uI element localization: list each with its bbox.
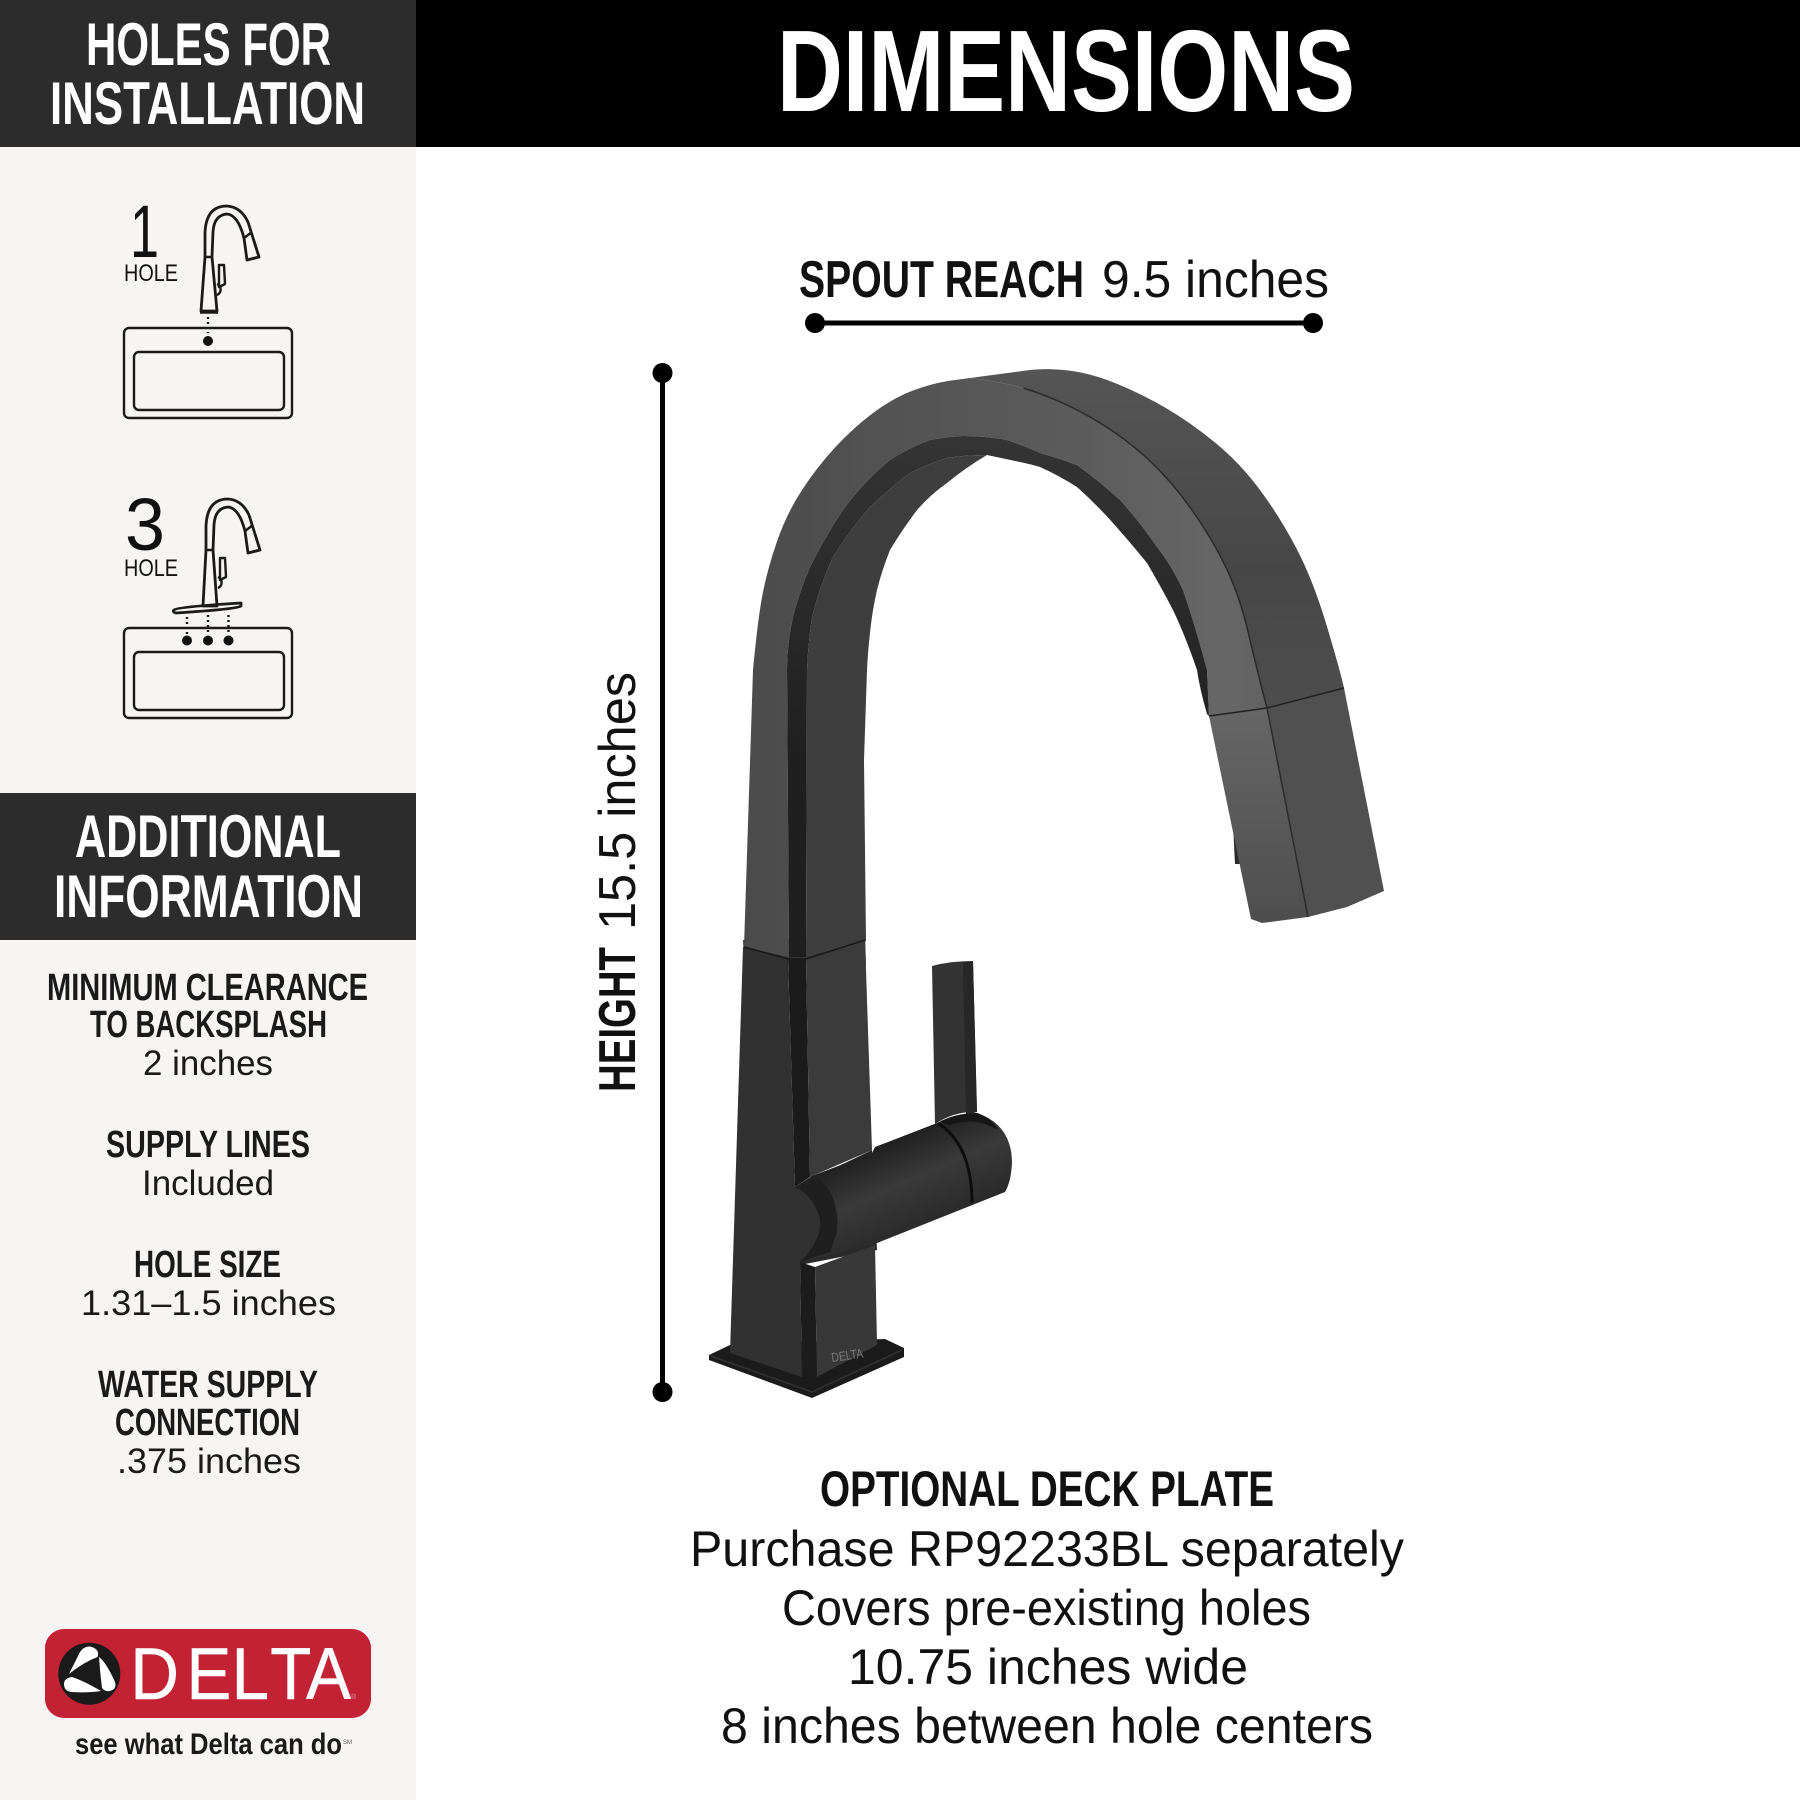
- logo: delta: DELTA: [130, 1633, 351, 1715]
- icon: three hole installation: HOLE: [124, 555, 178, 582]
- dimension: height: [589, 363, 672, 1402]
- faucet joint lines: [744, 388, 1267, 959]
- text block: water supply connection: CONNECTION: [115, 1402, 300, 1444]
- header: holes for installation: INSTALLATION: [50, 70, 365, 137]
- text block: optional deck plate: Purchase RP92233BL separately: [690, 1521, 1404, 1577]
- logo: delta: SM: [343, 1740, 352, 1746]
- logo: delta: ®: [351, 1693, 357, 1701]
- title: dimensions: [416, 0, 1800, 147]
- illustration: matte black faucet: [709, 369, 1384, 1398]
- text block: hole size: [81, 1244, 336, 1323]
- title: dimensions: DIMENSIONS: [777, 6, 1355, 136]
- faucet deck plate: [709, 1339, 904, 1398]
- panel: left sidebar: [0, 0, 416, 1800]
- text block: supply lines: Included: [142, 1164, 274, 1203]
- text block: minimum clearance: MINIMUM CLEARANCE: [47, 967, 368, 1009]
- dimension: spout reach: SPOUT REACH: [799, 251, 1084, 309]
- icon: three hole installation: [124, 483, 292, 718]
- text block: optional deck plate: 8 inches between hole centers: [721, 1698, 1373, 1754]
- logo: delta: [45, 1629, 371, 1761]
- text block: optional deck plate: Covers pre-existing holes: [782, 1580, 1311, 1636]
- text block: minimum clearance: TO BACKSPLASH: [90, 1004, 327, 1046]
- header: holes for installation: HOLES FOR: [86, 11, 331, 78]
- faucet spout inner band: [787, 436, 1209, 957]
- text block: water supply connection: [98, 1364, 318, 1481]
- icon: three hole installation: 3: [125, 483, 165, 566]
- text block: water supply connection: WATER SUPPLY: [98, 1364, 318, 1406]
- text block: optional deck plate: [690, 1461, 1404, 1754]
- header: additional information: ADDITIONAL: [75, 803, 341, 870]
- faucet handle cylinder: [795, 1113, 1012, 1262]
- faucet lower body: [730, 935, 877, 1377]
- text block: hole size: HOLE SIZE: [134, 1244, 281, 1286]
- icon: one hole installation: HOLE: [124, 260, 178, 287]
- faucet lower body: DELTA: [830, 1346, 864, 1365]
- text block: water supply connection: .375 inches: [117, 1442, 301, 1481]
- header: additional information: [0, 793, 416, 940]
- icon: one hole installation: 1: [130, 190, 159, 273]
- icon: one hole installation: [124, 190, 292, 418]
- dimension: spout reach: [799, 251, 1329, 333]
- text block: supply lines: [106, 1124, 310, 1203]
- text block: minimum clearance: 2 inches: [143, 1044, 273, 1083]
- header: holes for installation: [0, 0, 416, 147]
- faucet spout right face: [970, 369, 1344, 708]
- header: additional information: INFORMATION: [54, 863, 363, 930]
- faucet handle lever: [932, 961, 977, 1124]
- text block: optional deck plate: 10.75 inches wide: [848, 1639, 1248, 1695]
- text block: minimum clearance: [47, 967, 368, 1083]
- dimension: spout reach: 9.5 inches: [1102, 251, 1329, 309]
- logo: delta: see what Delta can do: [75, 1728, 342, 1761]
- faucet pull-down spray head: [1209, 688, 1384, 923]
- text block: supply lines: SUPPLY LINES: [106, 1124, 310, 1166]
- faucet spout front face: [744, 378, 1267, 957]
- text block: hole size: 1.31–1.5 inches: [81, 1284, 336, 1323]
- dimension: height: 15.5 inches: [589, 672, 647, 930]
- dimension: height: HEIGHT: [589, 947, 647, 1092]
- text block: optional deck plate: OPTIONAL DECK PLATE: [820, 1461, 1274, 1517]
